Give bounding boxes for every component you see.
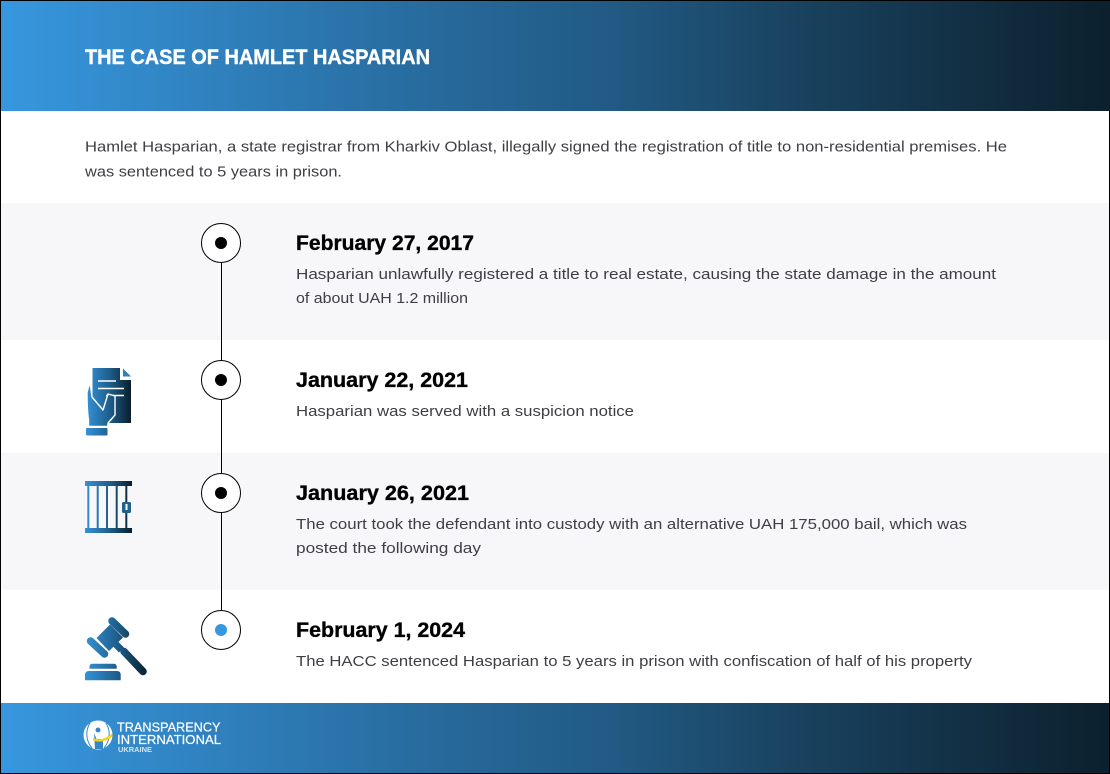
date: January 22, 2021 xyxy=(296,369,468,392)
intro text: was sentenced to 5 years in prison. xyxy=(84,164,342,180)
logo wordmark: INTERNATIONAL xyxy=(117,732,221,747)
icon: prison bars xyxy=(85,481,132,533)
panel: row 3 background xyxy=(1,453,1109,590)
timeline marker 4 xyxy=(202,610,240,650)
description: The HACC sentenced Hasparian to 5 years in prison with confiscation of half of his property xyxy=(296,653,973,670)
icon: judge gavel xyxy=(85,621,143,680)
description: Hasparian was served with a suspicion notice xyxy=(296,403,634,420)
event 2 xyxy=(296,369,634,420)
event 3 xyxy=(296,482,967,557)
logo wordmark: UKRAINE xyxy=(118,747,152,754)
logo emblem xyxy=(84,720,112,750)
event 1 xyxy=(296,232,997,307)
event 4 xyxy=(296,619,973,670)
header band xyxy=(1,1,1110,111)
title: THE CASE OF HAMLET HASPARIAN xyxy=(85,46,430,69)
icon: hand holding document xyxy=(86,368,131,436)
logo wordmark xyxy=(117,720,221,754)
intro text: Hamlet Hasparian, a state registrar from Kharkiv Oblast, illegally signed the registration of title to non-residential premises. He xyxy=(85,138,1007,156)
timeline marker 2 xyxy=(202,360,240,400)
description: Hasparian unlawfully registered a title to real estate, causing the state damage in the amount xyxy=(296,266,997,283)
panel: row 1 background xyxy=(1,203,1109,340)
description: posted the following day xyxy=(296,540,482,557)
description: The court took the defendant into custody with an alternative UAH 175,000 bail, which was xyxy=(296,516,967,533)
description xyxy=(296,266,997,307)
logo wordmark: TRANSPARENCY xyxy=(117,720,221,734)
date: January 26, 2021 xyxy=(296,482,469,505)
logo: Transparency International Ukraine xyxy=(84,720,221,754)
date: February 27, 2017 xyxy=(296,232,474,255)
description: of about UAH 1.2 million xyxy=(296,290,468,307)
timeline line xyxy=(220,243,222,630)
timeline marker 3 xyxy=(202,474,240,512)
footer band xyxy=(1,703,1110,773)
intro text xyxy=(84,138,1007,180)
timeline marker 1 xyxy=(202,224,240,262)
description xyxy=(296,516,967,557)
date: February 1, 2024 xyxy=(296,619,465,642)
